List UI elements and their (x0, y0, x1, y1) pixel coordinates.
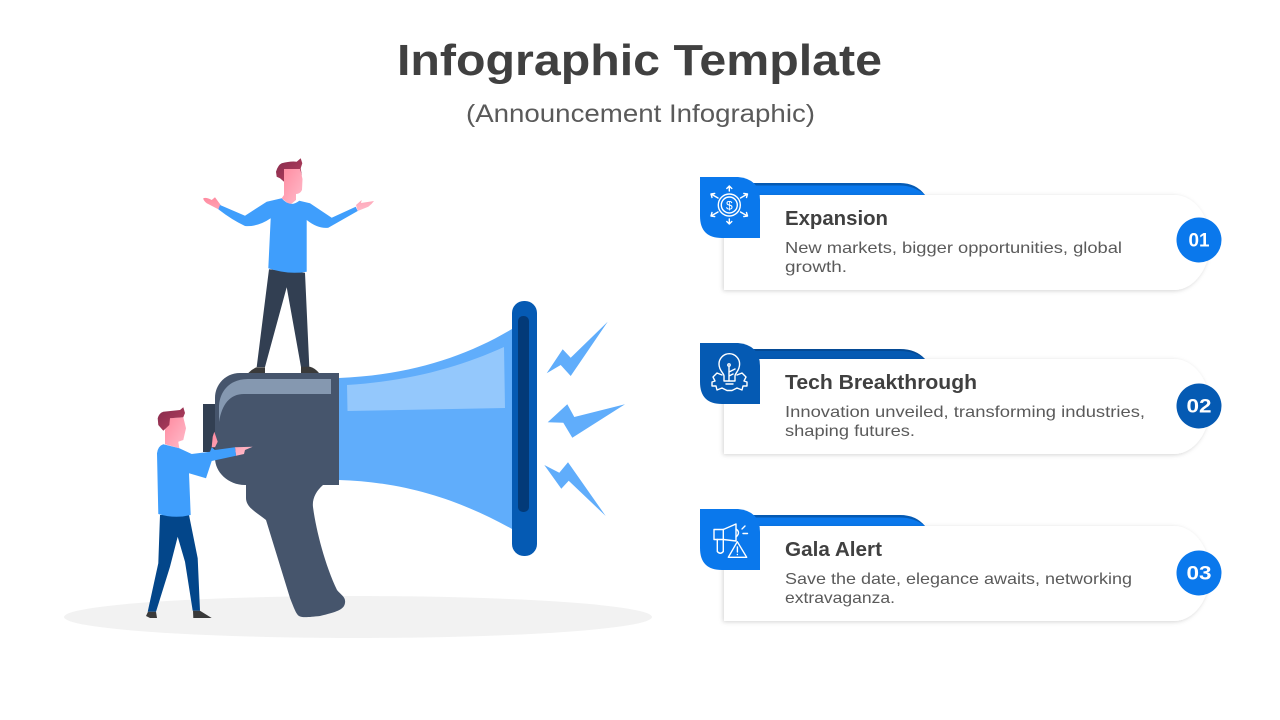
shoes (248, 367, 319, 373)
megaphone back plate (203, 404, 217, 452)
description (785, 571, 1132, 607)
subtitle: (Announcement Infographic) (466, 100, 815, 128)
sound bolt top (547, 322, 608, 376)
tab (745, 349, 925, 359)
icon tile (700, 343, 760, 404)
hair (276, 158, 302, 182)
number badge (1176, 218, 1222, 262)
shoes (146, 611, 212, 618)
icon tile (700, 509, 760, 570)
icon tile (700, 177, 760, 238)
description: Save the date, elegance awaits, networking (785, 571, 1132, 588)
number badge (1176, 384, 1222, 428)
shirt (218, 198, 358, 273)
shirt (157, 444, 236, 517)
heading: Tech Breakthrough (785, 372, 977, 394)
card body (724, 195, 1210, 290)
neck and face (282, 168, 302, 205)
number badge: 03 (1186, 564, 1212, 584)
card 1: Expansion (700, 177, 1222, 290)
number badge: 01 (1188, 230, 1210, 252)
heading: Expansion (785, 208, 888, 230)
icon: megaphone alert (714, 524, 748, 557)
body highlight (219, 379, 331, 422)
icon: money expansion (711, 186, 748, 224)
description (785, 240, 1122, 276)
rim inner slot (518, 316, 529, 512)
heading: Gala Alert (785, 539, 882, 561)
tab (745, 515, 925, 526)
sound bolt middle (548, 404, 625, 438)
legs (257, 269, 309, 367)
title: Infographic Template (397, 36, 882, 85)
person standing on megaphone (203, 158, 374, 373)
description: Innovation unveiled, transforming industries, (785, 404, 1145, 421)
description: shaping futures. (785, 423, 915, 440)
icon: bulb and gear (712, 354, 747, 390)
description: extravaganza. (785, 590, 895, 607)
megaphone horn (339, 329, 512, 529)
number badge: 02 (1186, 396, 1212, 418)
description: New markets, bigger opportunities, global (785, 240, 1122, 257)
card body (724, 359, 1210, 454)
tab (745, 183, 925, 195)
hair (158, 407, 185, 431)
person pointing at megaphone (146, 407, 253, 618)
sound bolt bottom (544, 462, 606, 516)
horn rim (512, 301, 537, 556)
horn highlight (347, 347, 505, 411)
card 3: Gala Alert (700, 509, 1222, 621)
neck and face (165, 417, 186, 448)
card body (724, 526, 1210, 621)
icon: money expansion: $ (726, 198, 733, 212)
description (785, 404, 1145, 440)
description: growth. (785, 259, 847, 276)
ground shadow (64, 596, 652, 638)
illustration: megaphone (203, 301, 625, 617)
megaphone body and handle (215, 373, 345, 617)
number badge (1176, 550, 1222, 596)
hands (203, 197, 374, 211)
hands (212, 432, 253, 456)
legs (148, 515, 200, 612)
card 2: Tech Breakthrough (700, 343, 1222, 454)
